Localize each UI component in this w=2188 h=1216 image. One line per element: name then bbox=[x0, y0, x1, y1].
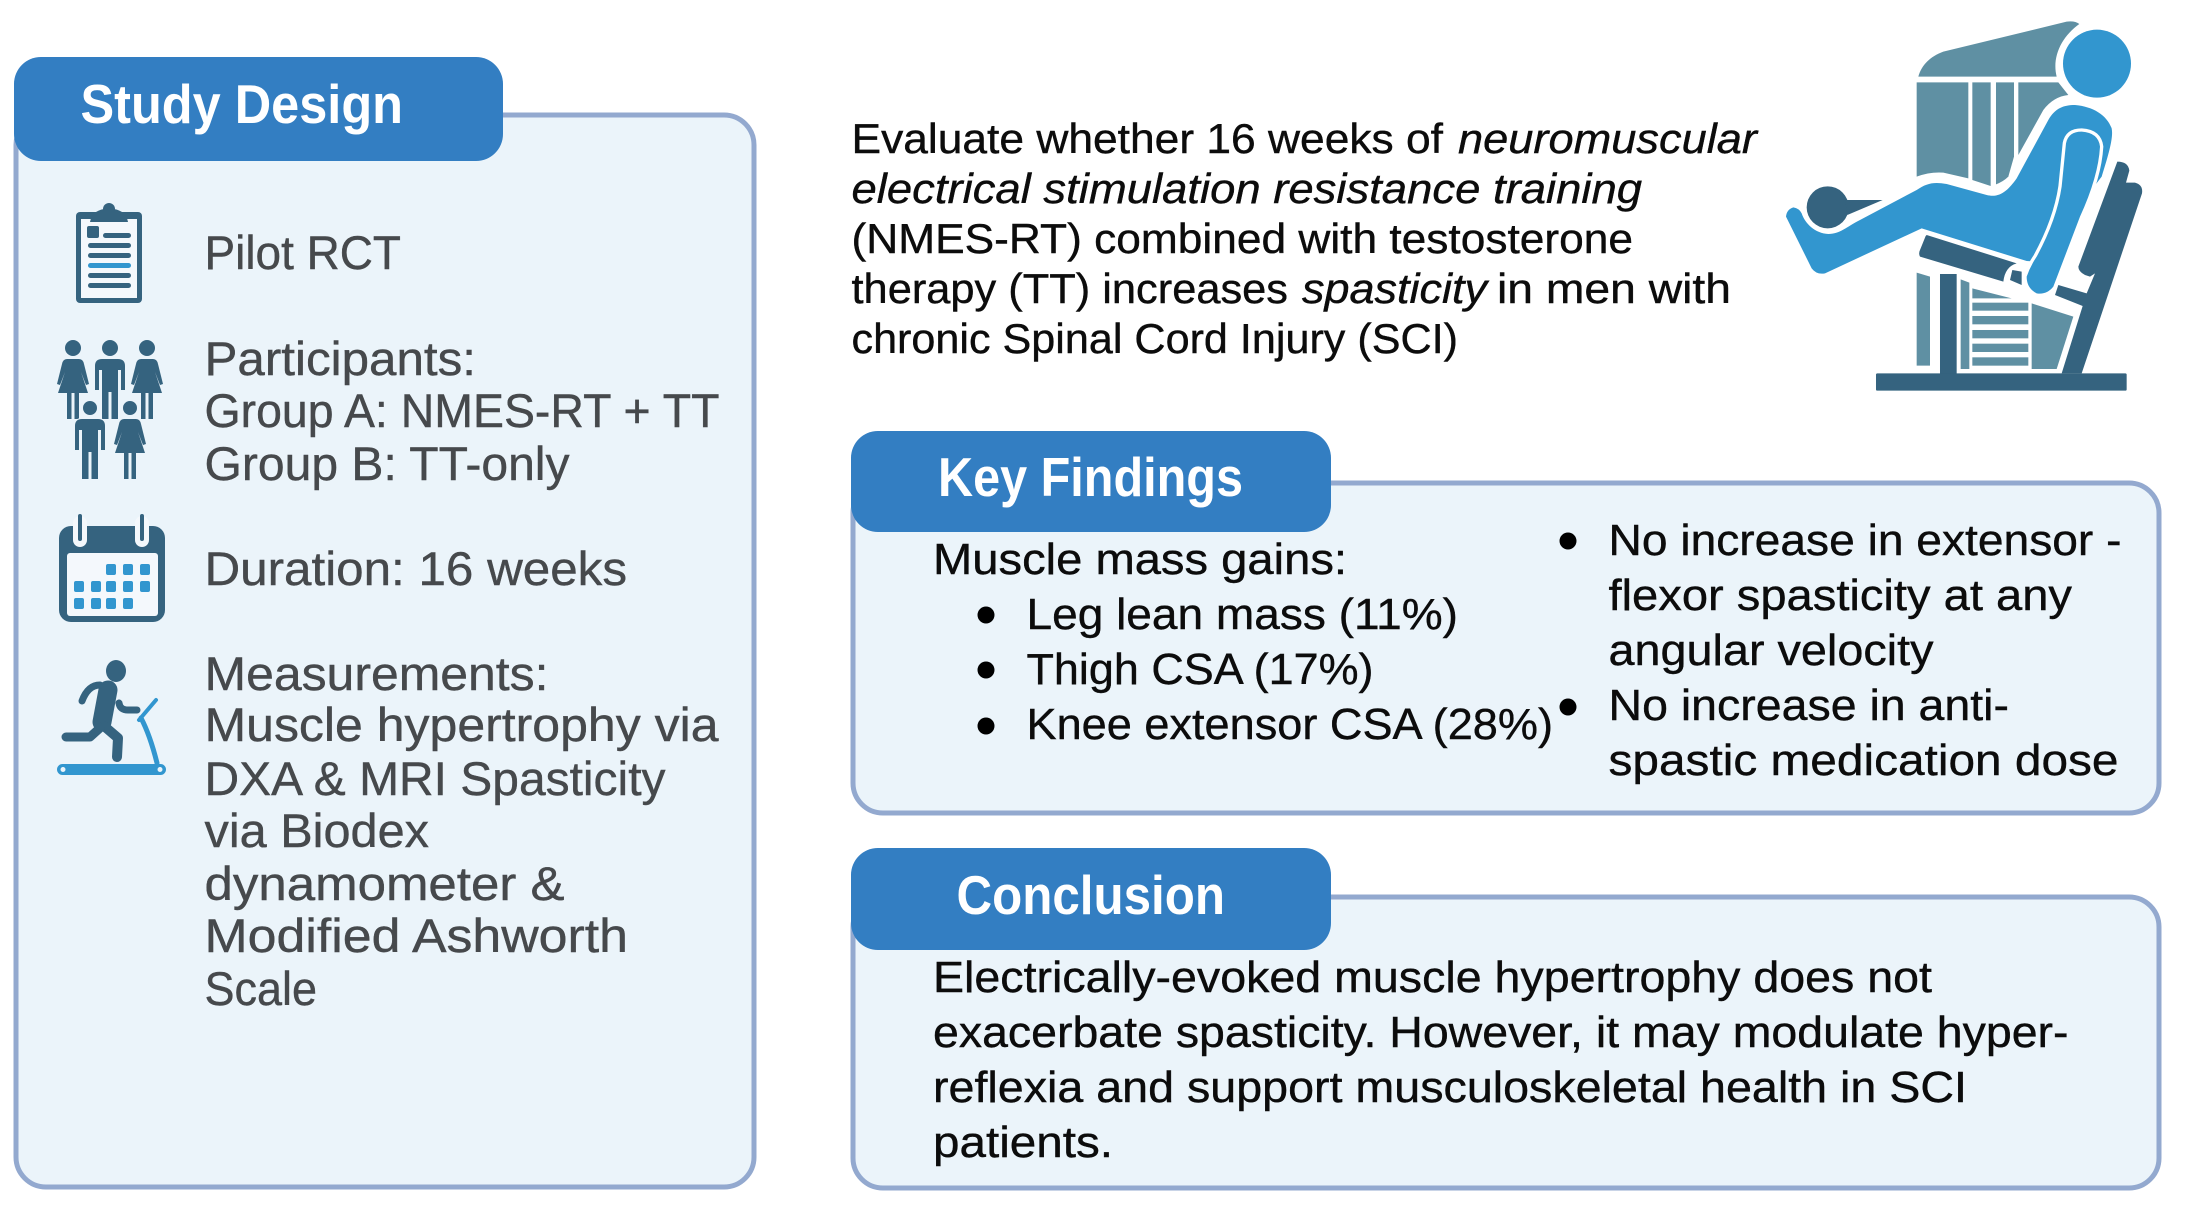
conclusion text: reflexia and support musculoskeletal health in SCI bbox=[933, 1063, 1967, 1112]
participants text: Participants: bbox=[204, 332, 476, 385]
objective text block bbox=[852, 115, 1759, 362]
objective text block: Evaluate whether 16 weeks of bbox=[852, 115, 1443, 162]
heading: key findings: Key Findings bbox=[938, 446, 1243, 508]
measurements text: DXA & MRI Spasticity bbox=[204, 752, 666, 805]
machine seat and base bbox=[1807, 162, 2142, 391]
spasticity findings list: No increase in extensor - bbox=[1608, 516, 2122, 565]
study type text: Pilot RCT bbox=[204, 226, 401, 279]
muscle mass gains list: Muscle mass gains: bbox=[933, 535, 1347, 584]
spasticity findings list: angular velocity bbox=[1608, 626, 1934, 675]
measurements text: Muscle hypertrophy via bbox=[204, 698, 719, 751]
panel background: conclusion bbox=[853, 897, 2159, 1188]
heading: study design: Study Design bbox=[80, 73, 403, 135]
muscle mass gains list bbox=[933, 535, 1553, 749]
objective text block: electrical stimulation resistance training bbox=[852, 165, 1642, 212]
measurements text: Modified Ashworth bbox=[204, 909, 628, 962]
conclusion text: Electrically-evoked muscle hypertrophy does not bbox=[933, 953, 1932, 1002]
measurements text: dynamometer & bbox=[204, 857, 564, 910]
objective text block: chronic Spinal Cord Injury (SCI) bbox=[852, 315, 1458, 362]
measurements text bbox=[204, 647, 719, 1015]
panel: key findings bbox=[851, 431, 2159, 813]
objective text block: spasticity bbox=[1302, 265, 1490, 312]
heading: conclusion: Conclusion bbox=[956, 864, 1225, 926]
spasticity findings list: No increase in anti- bbox=[1608, 681, 2009, 730]
measurements text: Scale bbox=[204, 962, 317, 1015]
participants text bbox=[204, 332, 720, 490]
icon: seated leg extension machine bbox=[1786, 21, 2142, 391]
icon: treadmill bbox=[58, 660, 165, 774]
icon: clipboard bbox=[76, 203, 142, 303]
objective text block: therapy (TT) increases bbox=[852, 265, 1288, 312]
objective text block: (NMES-RT) combined with testosterone bbox=[852, 215, 1633, 262]
muscle mass gains list: Knee extensor CSA (28%) bbox=[1026, 700, 1553, 749]
machine frame bbox=[1917, 21, 2079, 369]
heading: study design bbox=[14, 57, 503, 161]
conclusion text: patients. bbox=[933, 1118, 1113, 1167]
conclusion text bbox=[933, 953, 2068, 1167]
panel: study design bbox=[14, 57, 754, 1187]
icon: participants bbox=[57, 340, 163, 479]
measurements text: Measurements: bbox=[204, 647, 548, 700]
duration text: Duration: 16 weeks bbox=[204, 542, 627, 595]
participants text: Group A: NMES-RT + TT bbox=[204, 384, 720, 437]
panel: conclusion bbox=[851, 848, 2159, 1188]
spasticity findings list: spastic medication dose bbox=[1608, 736, 2118, 785]
muscle mass gains list: Leg lean mass (11%) bbox=[1026, 590, 1458, 639]
participants text: Group B: TT-only bbox=[204, 437, 570, 490]
panel background: study design bbox=[16, 115, 754, 1187]
objective text block: neuromuscular bbox=[1458, 115, 1759, 162]
panel background: key findings bbox=[853, 483, 2159, 813]
heading: key findings bbox=[851, 431, 1331, 532]
seated person bbox=[1786, 30, 2131, 294]
objective text block: in men with bbox=[1497, 265, 1731, 312]
icon: calendar bbox=[59, 514, 165, 622]
spasticity findings list: flexor spasticity at any bbox=[1608, 571, 2072, 620]
muscle mass gains list: Thigh CSA (17%) bbox=[1026, 645, 1374, 694]
conclusion text: exacerbate spasticity. However, it may modulate hyper- bbox=[933, 1008, 2068, 1057]
heading: conclusion bbox=[851, 848, 1331, 950]
spasticity findings list bbox=[1560, 516, 2122, 785]
measurements text: via Biodex bbox=[204, 804, 429, 857]
